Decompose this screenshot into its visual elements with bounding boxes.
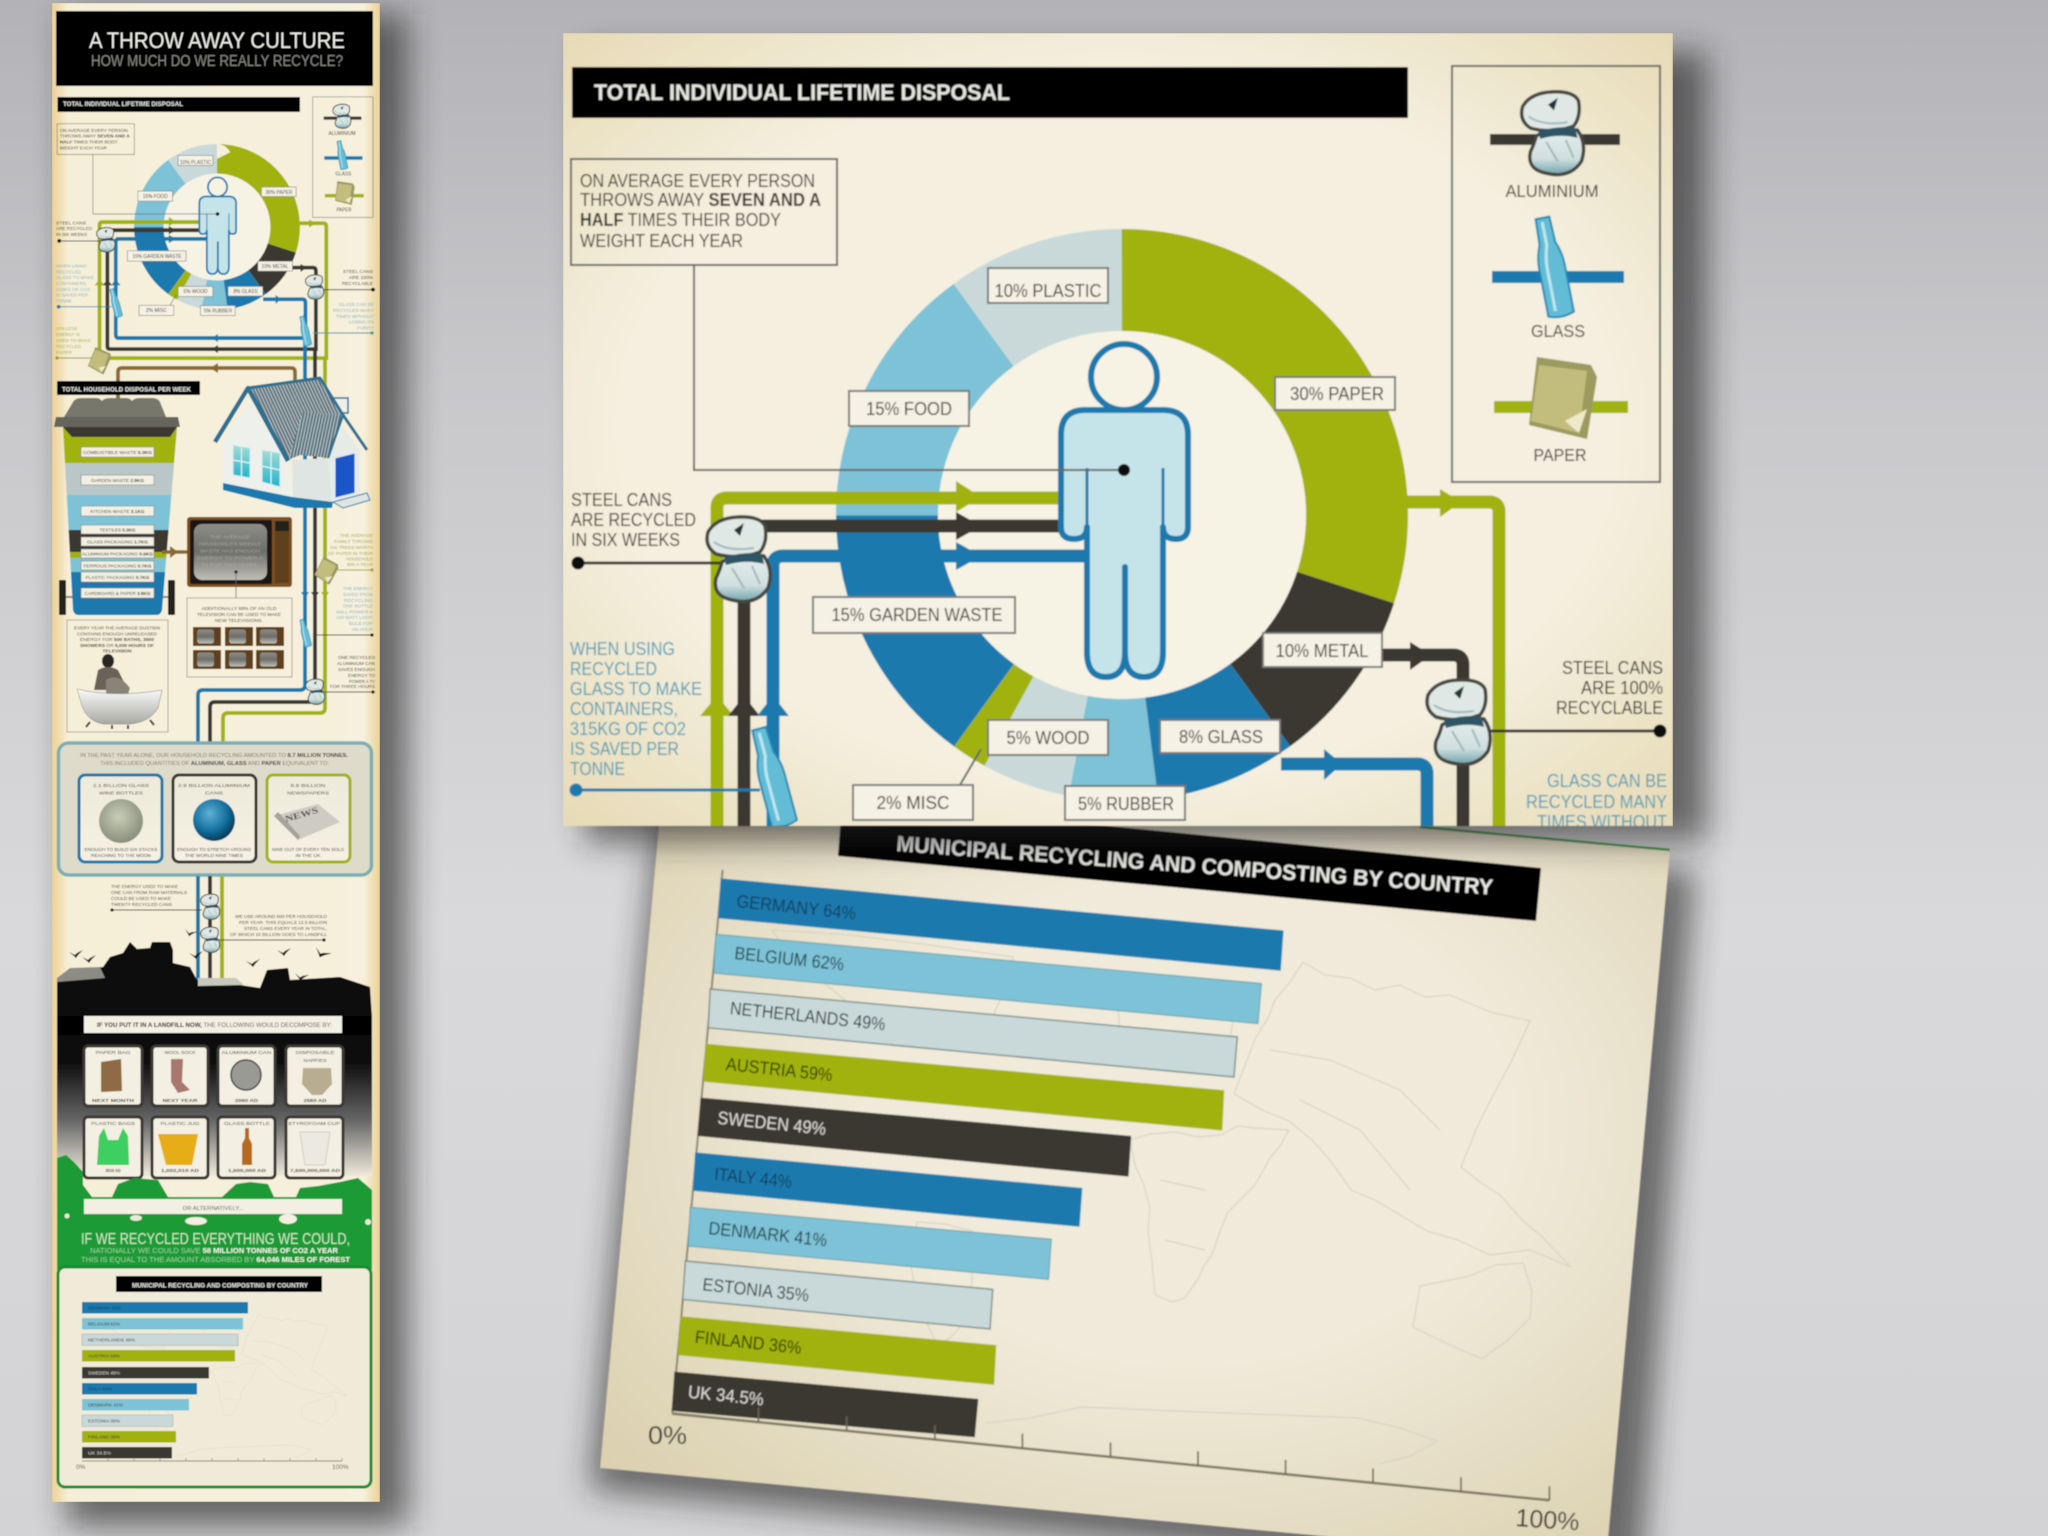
panel: dustbin energy and bath: SHOWERS OR 5,000 HOURS OF <box>80 643 154 648</box>
bar chart: recycling by country: AUSTRIA 59% <box>725 1054 833 1085</box>
axis small: 100% <box>332 1464 349 1471</box>
callouts beside pipes on right: ONE RECYCLED <box>338 655 376 660</box>
bar chart: recycling by country: SWEDEN 49% <box>717 1108 827 1139</box>
alternative strip: OR ALTERNATIVELY... <box>182 1206 244 1212</box>
callouts beside pipes on right <box>301 533 376 694</box>
card: glass wine bottles: WINE BOTTLES <box>99 790 143 796</box>
legend labels: ALUMINIUM <box>1506 181 1598 201</box>
panel: dustbin energy and bath: ENERGY FOR 500 BATHS, 3500 <box>80 637 154 642</box>
card labels: 2560 AD <box>304 1098 327 1103</box>
callout: steel cans 100% recyclable: STEEL CANS <box>1562 657 1663 678</box>
donut labels small: 10% PLASTIC <box>180 160 211 166</box>
callouts left small: ARE RECYCLED <box>56 226 93 231</box>
title block: A THROW AWAY CULTURE <box>89 28 345 53</box>
callouts left small: GLASS TO MAKE <box>56 275 94 280</box>
card: aluminium cans: CANS <box>205 790 223 796</box>
panel: dustbin energy and bath <box>67 620 168 732</box>
callouts left small: IS SAVED PER <box>56 293 89 298</box>
callout: steel cans 100% recyclable: ARE 100% <box>1581 677 1663 698</box>
panel: household recycling total: THIS INCLUDED QUANTITIES OF ALUMINIUM, GLASS AND PAPER EQUIVALENT TO: <box>100 761 329 767</box>
card labels: PLASTIC JUG <box>160 1121 200 1126</box>
heading: lifetime disposal: TOTAL INDIVIDUAL LIFETIME DISPOSAL <box>594 80 1010 105</box>
icon: wheelie bin with waste breakdown: GARDEN WASTE 2.9KG <box>91 478 144 483</box>
icon: can on pipes upper <box>201 894 220 919</box>
icon: bottle on blue pipe <box>298 619 312 648</box>
icon: glass bottle <box>242 1128 252 1165</box>
callouts beside pipes on right: SAVED FROM <box>343 592 373 597</box>
icon: wheelie bin with waste breakdown: FERROUS PACKAGING 0.7KG <box>84 564 152 568</box>
callouts right small: STEEL CANS <box>343 269 373 274</box>
axis: 0 to 100 percent: 0% <box>648 1422 687 1450</box>
card: glass wine bottles <box>79 775 162 862</box>
callouts beside pipes on right: THE ENERGY <box>343 586 374 591</box>
callout: recycled glass saves CO2: 315KG OF CO2 <box>570 718 686 739</box>
bar chart small: DENMARK 41% <box>88 1402 123 1408</box>
callouts beside pipes on right: SAVES ENOUGH <box>338 667 375 672</box>
icon: nappy <box>302 1068 332 1095</box>
callouts beside pipes on right: FAMILY THROWS <box>334 539 373 544</box>
callout: steel cans per household: WE USE AROUND 600 PER HOUSEHOLD <box>235 914 328 919</box>
icon: man in bathtub <box>77 654 162 729</box>
card labels: NAPPIES <box>304 1058 326 1063</box>
bar chart small: ESTONIA 35% <box>88 1418 120 1424</box>
landfill silhouette with birds <box>57 927 372 1017</box>
title block: HOW MUCH DO WE REALLY RECYCLE? <box>91 53 343 70</box>
bar chart: recycling by country: ITALY 44% <box>713 1164 793 1192</box>
donut segment labels: 15% FOOD <box>866 399 952 419</box>
card: newspapers: NINE OUT OF EVERY TEN SOLD <box>272 847 345 852</box>
bar chart small: ITALY 44% <box>88 1386 112 1392</box>
callouts left small: IN SIX WEEKS <box>56 232 87 237</box>
panel: dustbin energy and bath: TELEVISION <box>102 648 132 654</box>
callouts beside pipes on right: ALUMINIUM CAN <box>337 661 375 666</box>
callout: recycled glass saves CO2: IS SAVED PER <box>570 738 679 759</box>
axis: 0 to 100 percent: 100% <box>1515 1504 1580 1536</box>
callouts beside pipes on right: ONE BOTTLE <box>343 604 373 608</box>
card labels: 3010 AD <box>106 1168 121 1173</box>
legend labels small <box>328 131 356 213</box>
heading: municipal recycling: MUNICIPAL RECYCLING AND COMPOSTING BY COUNTRY <box>896 831 1494 900</box>
card labels: 1,500,000 AD <box>228 1168 267 1173</box>
callout: glass recycled many times: GLASS CAN BE <box>1547 770 1667 791</box>
icon: television with household waste fact: TV FOR TWO YEARS. <box>201 562 259 568</box>
callout: glass recycled many times <box>1526 773 1668 827</box>
bar chart: recycling by country: NETHERLANDS 49% <box>729 998 886 1034</box>
callout: raw material energy: ONE CAN FROM RAW MATERIALS <box>111 890 187 895</box>
icon: paper bag <box>101 1059 122 1092</box>
donut segment labels: 10% PLASTIC <box>994 281 1102 301</box>
panel: household recycling total <box>58 743 372 875</box>
donut segment labels: 8% GLASS <box>1179 727 1263 747</box>
legend labels small: ALUMINIUM <box>328 131 356 137</box>
callouts left small: ENERGY IS <box>56 332 80 337</box>
heading: if we recycled everything: NATIONALLY WE COULD SAVE 58 MILLION TONNES OF CO2 A YEAR <box>90 1246 339 1255</box>
donut chart with pipes, person and legend icons <box>568 64 1668 828</box>
legend labels <box>1506 181 1598 465</box>
callouts beside pipes on right: BIN A YEAR <box>347 562 374 567</box>
callouts right small: RECYCLED MANY <box>333 308 375 313</box>
card labels: WOOL SOCK <box>164 1050 196 1055</box>
heading: lifetime disposal small: TOTAL INDIVIDUAL LIFETIME DISPOSAL <box>63 101 183 108</box>
panel: old television re-use: TELEVISION CAN BE USED TO MAKE <box>197 612 281 617</box>
callout: steel cans recycled in six weeks: IN SIX WEEKS <box>571 529 680 550</box>
icon: paper on green pipe <box>313 556 340 586</box>
callouts beside pipes on right: HOUSEHOLD <box>346 556 374 562</box>
icon: can on pipes <box>306 679 325 704</box>
card: newspapers: NEWSPAPERS <box>287 790 329 796</box>
donut labels small: 10% METAL <box>262 264 289 270</box>
arrow: brown pipe <box>210 363 218 373</box>
bar chart small: UK 34.5% <box>88 1450 111 1456</box>
panel: dustbin energy and bath: EVERY YEAR THE AVERAGE DUSTBIN <box>74 626 160 630</box>
icon: plastic bag <box>97 1128 129 1165</box>
callouts beside pipes on right: AN HOUR <box>352 627 374 632</box>
card labels: 2060 AD <box>235 1098 259 1103</box>
legend labels: PAPER <box>1534 445 1586 465</box>
donut segment labels: 10% METAL <box>1276 641 1368 661</box>
callouts beside pipes on right: RECYCLING <box>344 598 373 603</box>
callouts left small: PAPER <box>56 350 73 355</box>
callout: steel cans per household: PER YEAR. THIS EQUALS 12.5 BILLION <box>239 920 327 925</box>
callout: steel cans recycled in six weeks: ARE RECYCLED <box>571 509 696 530</box>
panel: municipal recycling by country, tilted close-up <box>600 760 1670 1536</box>
axis small <box>76 1458 349 1471</box>
callout: recycled glass saves CO2: WHEN USING <box>570 638 675 659</box>
card labels: ALUMINIUM CAN <box>222 1050 272 1055</box>
callout: steel cans per household: STEEL CANS EVERY YEAR IN TOTAL, <box>244 926 327 931</box>
card grid: decomposition times <box>84 1046 343 1178</box>
callouts right small: ARE 100% <box>349 275 373 280</box>
panel: country chart small <box>58 1267 371 1487</box>
donut segment labels: 2% MISC <box>876 793 950 813</box>
panel: dustbin energy and bath: CONTAINS ENOUGH UNRELEASED <box>77 632 158 636</box>
card: aluminium cans <box>173 775 256 862</box>
legend labels small: PAPER <box>336 207 352 213</box>
text block: body weight small: WEIGHT EACH YEAR <box>60 145 107 150</box>
donut segment labels: 5% WOOD <box>1006 728 1090 748</box>
heading: landfill decompose strip <box>84 1016 342 1033</box>
panel: household recycling total: IN THE PAST YEAR ALONE, OUR HOUSEHOLD RECYCLING AMOUNTED TO 8.7 MILLION TONNES. <box>80 753 349 759</box>
lifetime disposal diagram, small version <box>57 97 375 358</box>
callouts left small: WHEN USING <box>56 264 87 269</box>
donut labels small: 2% MISC <box>146 308 167 314</box>
bar chart small: NETHERLANDS 49% <box>88 1338 135 1342</box>
callouts beside pipes on right: ENERGY TO <box>348 673 375 678</box>
callouts right small: GLASS CAN BE <box>339 302 374 307</box>
callout: recycled glass saves CO2: GLASS TO MAKE <box>570 678 702 699</box>
icon: wheelie bin with waste breakdown: COMBUSTIBLE WASTE 5.3KG <box>83 450 152 455</box>
card: aluminium cans: THE WORLD NINE TIMES <box>185 853 243 858</box>
callouts beside pipes on right: FOR THREE HOURS <box>330 684 375 689</box>
icon: wheelie bin with waste breakdown: GLASS PACKAGING 1.7KG <box>87 540 148 544</box>
text block: body weight small: THROWS AWAY SEVEN AND A <box>60 134 130 139</box>
icon: wool sock <box>171 1059 190 1093</box>
card: newspapers: IN THE UK <box>296 853 321 858</box>
donut labels small: 30% PAPER <box>266 190 293 196</box>
callout: steel cans 100% recyclable <box>1556 657 1663 718</box>
callout: glass recycled many times: RECYCLED MANY <box>1526 791 1667 812</box>
icon: crushed can <box>231 1060 261 1090</box>
callout: raw material energy: THE ENERGY USED TO MAKE <box>111 884 178 889</box>
bar chart: recycling by country: UK 34.5% <box>687 1382 765 1410</box>
callout: recycled glass saves CO2: RECYCLED <box>570 658 657 679</box>
forest green section <box>57 1155 372 1270</box>
icon: can on pipes lower <box>201 927 220 952</box>
heading: municipal recycling <box>838 800 1541 921</box>
icon: wheelie bin with waste breakdown: CARDBOARD & PAPER 3.8KG <box>84 591 151 596</box>
callouts left small: CONTAINERS, <box>56 281 87 286</box>
card labels: 7,500,000,000 AD <box>290 1168 341 1173</box>
donut labels small: 15% FOOD <box>143 194 168 200</box>
pipes to landfill <box>198 876 222 980</box>
callouts right small: RECYCLABLE <box>342 281 373 286</box>
donut labels small: 15% GARDEN WASTE <box>132 254 182 260</box>
icon: television with household waste fact: ENERGY TO POWER A <box>197 556 264 560</box>
landfill dark fade panel <box>57 1016 372 1176</box>
callouts left small: STEEL CANS <box>56 220 86 225</box>
bar chart small: SWEDEN 49% <box>88 1370 120 1376</box>
callouts beside pipes on right: THE AVERAGE <box>340 533 373 538</box>
bar chart small: BELGIUM 62% <box>88 1322 120 1326</box>
callout: recycled glass saves CO2 <box>570 638 702 779</box>
heading: if we recycled everything <box>81 1231 350 1264</box>
callout: steel cans recycled in six weeks <box>571 489 696 550</box>
legend labels small: GLASS <box>335 171 352 177</box>
callout: steel cans per household: OF WHICH 10 BILLION GOES TO LANDFILL <box>230 932 327 937</box>
callouts left small: RECYCLED <box>56 269 82 274</box>
icon: bottle in pipe <box>298 316 312 347</box>
heading: if we recycled everything: THIS IS EQUAL TO THE AMOUNT ABSORBED BY 64,046 MILES OF FOREST <box>81 1255 350 1264</box>
alternative strip <box>84 1199 342 1214</box>
card labels: 1,002,010 AD <box>161 1168 200 1173</box>
donut labels small: 5% RUBBER <box>204 308 232 314</box>
callouts left small: TONNE <box>56 298 72 303</box>
text block: body weight small: ON AVERAGE EVERY PERSON <box>60 128 128 133</box>
bar chart: recycling by country: GERMANY 64% <box>736 891 857 924</box>
card labels: STYROFOAM CUP <box>288 1121 340 1126</box>
card labels: PAPER BAG <box>96 1050 131 1055</box>
callouts beside pipes on right: 100 WATT LIGHT <box>336 615 373 620</box>
title block <box>56 11 373 86</box>
callouts left small <box>55 220 94 360</box>
card: glass wine bottles: ENOUGH TO BUILD SIX STACKS <box>84 847 158 852</box>
icon: television with household waste fact: WASTE HAS ENOUGH <box>200 548 260 554</box>
card: newspapers <box>267 775 350 862</box>
shadow: full infographic <box>66 14 408 1526</box>
bar chart small <box>82 1302 248 1458</box>
panel: old television re-use: NEW TELEVISIONS. <box>215 618 263 623</box>
panel: full infographic poster <box>52 3 380 1502</box>
panel: total individual lifetime disposal close-up <box>563 33 1673 827</box>
callouts right small: PURITY <box>357 325 375 330</box>
donut labels small: 8% GLASS <box>234 289 258 295</box>
heading: household disposal <box>57 381 200 395</box>
axis: 0 to 100 percent <box>648 1408 1580 1536</box>
callout: steel cans recycled in six weeks: STEEL CANS <box>571 489 672 510</box>
donut segment labels: 5% RUBBER <box>1078 794 1174 814</box>
heading: chart small <box>116 1276 322 1292</box>
icon: wheelie bin with waste breakdown: TEXTILES 0.3KG <box>100 528 136 532</box>
bar chart: recycling by country <box>672 870 1284 1437</box>
icon: television with household waste fact: HOUSEHOLD'S WEEKLY <box>199 542 262 546</box>
callout: recycled glass saves CO2: TONNE <box>570 758 625 779</box>
brown pipe from bin to house <box>118 368 295 398</box>
callout: steel cans per household <box>218 914 328 942</box>
card: aluminium cans: 2.9 BILLION ALUMINIUM <box>178 783 250 788</box>
card labels: NEXT MONTH <box>92 1098 135 1103</box>
card labels: PLASTIC BAGS <box>91 1121 135 1126</box>
bar chart: recycling by country: DENMARK 41% <box>708 1218 828 1250</box>
heading: chart small: MUNICIPAL RECYCLING AND COMPOSTING BY COUNTRY <box>132 1284 308 1290</box>
callout: steel cans 100% recyclable: RECYCLABLE <box>1556 697 1663 718</box>
text block: seven and a half times: HALF TIMES THEIR BODY <box>580 209 781 230</box>
callouts beside pipes on right: OF PAPER IN THEIR <box>328 551 374 556</box>
icon: paper in pipe <box>87 346 113 375</box>
callout: glass recycled many times: TIMES WITHOUT <box>1537 811 1667 832</box>
text block: body weight small <box>60 128 130 150</box>
callouts beside pipes on right: WILL POWER A <box>336 610 374 614</box>
legend labels: GLASS <box>1531 321 1585 341</box>
callout: raw material energy: COULD BE USED TO MAKE <box>111 896 171 901</box>
text block: seven and a half times <box>580 170 821 251</box>
icon: television with household waste fact: THE AVERAGE <box>210 534 250 540</box>
callouts left small: 10% LESS <box>56 326 77 331</box>
shadow: lifetime disposal photo <box>585 52 1707 842</box>
heading: if we recycled everything: IF WE RECYCLED EVERYTHING WE COULD, <box>81 1231 350 1248</box>
bar chart small: FINLAND 36% <box>88 1434 120 1440</box>
icon: house <box>215 378 370 508</box>
panel: old television re-use <box>187 598 292 677</box>
bar chart: recycling by country: BELGIUM 62% <box>734 943 845 974</box>
bar chart small: AUSTRIA 59% <box>88 1354 120 1358</box>
text block: seven and a half times: ON AVERAGE EVERY PERSON <box>580 170 815 191</box>
panel: old television re-use: ADDITIONALLY 98% OF AN OLD <box>202 606 277 611</box>
donut labels small: 5% WOOD <box>184 289 208 295</box>
callouts left small: 315KG OF CO2 <box>56 287 90 292</box>
callout: recycled glass saves CO2: CONTAINERS, <box>570 698 678 719</box>
donut segment labels: 30% PAPER <box>1290 384 1384 404</box>
text block: body weight small: HALF TIMES THEIR BODY <box>60 139 119 144</box>
card labels <box>91 1050 341 1173</box>
card: glass wine bottles: REACHING TO THE MOON <box>91 853 151 858</box>
card: glass wine bottles: 2.1 BILLION GLASS <box>93 783 149 788</box>
callout: raw material energy <box>110 884 202 912</box>
callouts right small <box>313 269 375 335</box>
bar chart: recycling by country: FINLAND 36% <box>694 1327 802 1358</box>
bar chart small: GERMANY 64% <box>88 1306 121 1310</box>
callouts left small: USED TO MAKE <box>56 338 91 343</box>
card: newspapers: NEWS <box>284 805 319 824</box>
icon: wheelie bin with waste breakdown <box>54 398 185 615</box>
arrow: bin to television <box>162 546 187 558</box>
callouts right small: LOSING ITS <box>349 320 374 325</box>
world map background <box>772 930 1571 1464</box>
card labels: DISPOSABLE <box>296 1050 334 1055</box>
icon: wheelie bin with waste breakdown: KITCHEN WASTE 3.1KG <box>90 509 145 514</box>
card: newspapers: 8.6 BILLION <box>290 783 326 788</box>
heading: landfill decompose strip: IF YOU PUT IT IN A LANDFILL NOW, THE FOLLOWING WOULD DECOMPOSE BY: <box>97 1023 332 1029</box>
heading: household disposal: TOTAL HOUSEHOLD DISPOSAL PER WEEK <box>62 386 191 394</box>
icon: television with household waste fact <box>187 517 292 598</box>
card: aluminium cans: ENOUGH TO STRETCH AROUND <box>177 847 252 852</box>
axis small: 0% <box>76 1464 86 1471</box>
donut segment labels <box>832 281 1384 814</box>
bar chart: recycling by country: ESTONIA 35% <box>702 1274 810 1305</box>
card labels: GLASS BOTTLE <box>224 1121 270 1126</box>
callout: raw material energy: TWENTY RECYCLED CANS <box>111 902 172 907</box>
callouts right small: TIMES WITHOUT <box>336 314 374 319</box>
callouts beside pipes on right: SIX TREES WORTH <box>330 545 373 550</box>
donut labels small <box>132 160 293 314</box>
icon: wheelie bin with waste breakdown: ALUMINIUM PACKAGING 0.5KG <box>82 552 153 556</box>
icon: styrofoam cup <box>300 1132 330 1165</box>
callouts beside pipes on right: POWER A TV <box>349 679 376 684</box>
text block: seven and a half times: WEIGHT EACH YEAR <box>580 230 743 251</box>
icon: plastic jug <box>158 1134 198 1165</box>
icon: wheelie bin with waste breakdown: PLASTIC PACKAGING 0.7KG <box>86 575 150 580</box>
callouts beside pipes on right: BULB FOR <box>349 621 374 626</box>
text block: seven and a half times: THROWS AWAY SEVEN AND A <box>580 189 821 210</box>
right service pipes through house <box>198 338 325 742</box>
shadow: country chart photo <box>590 790 1695 1536</box>
card labels: NEXT YEAR <box>162 1098 198 1103</box>
callouts left small: RECYCLED <box>56 344 82 349</box>
donut segment labels: 15% GARDEN WASTE <box>832 605 1002 625</box>
